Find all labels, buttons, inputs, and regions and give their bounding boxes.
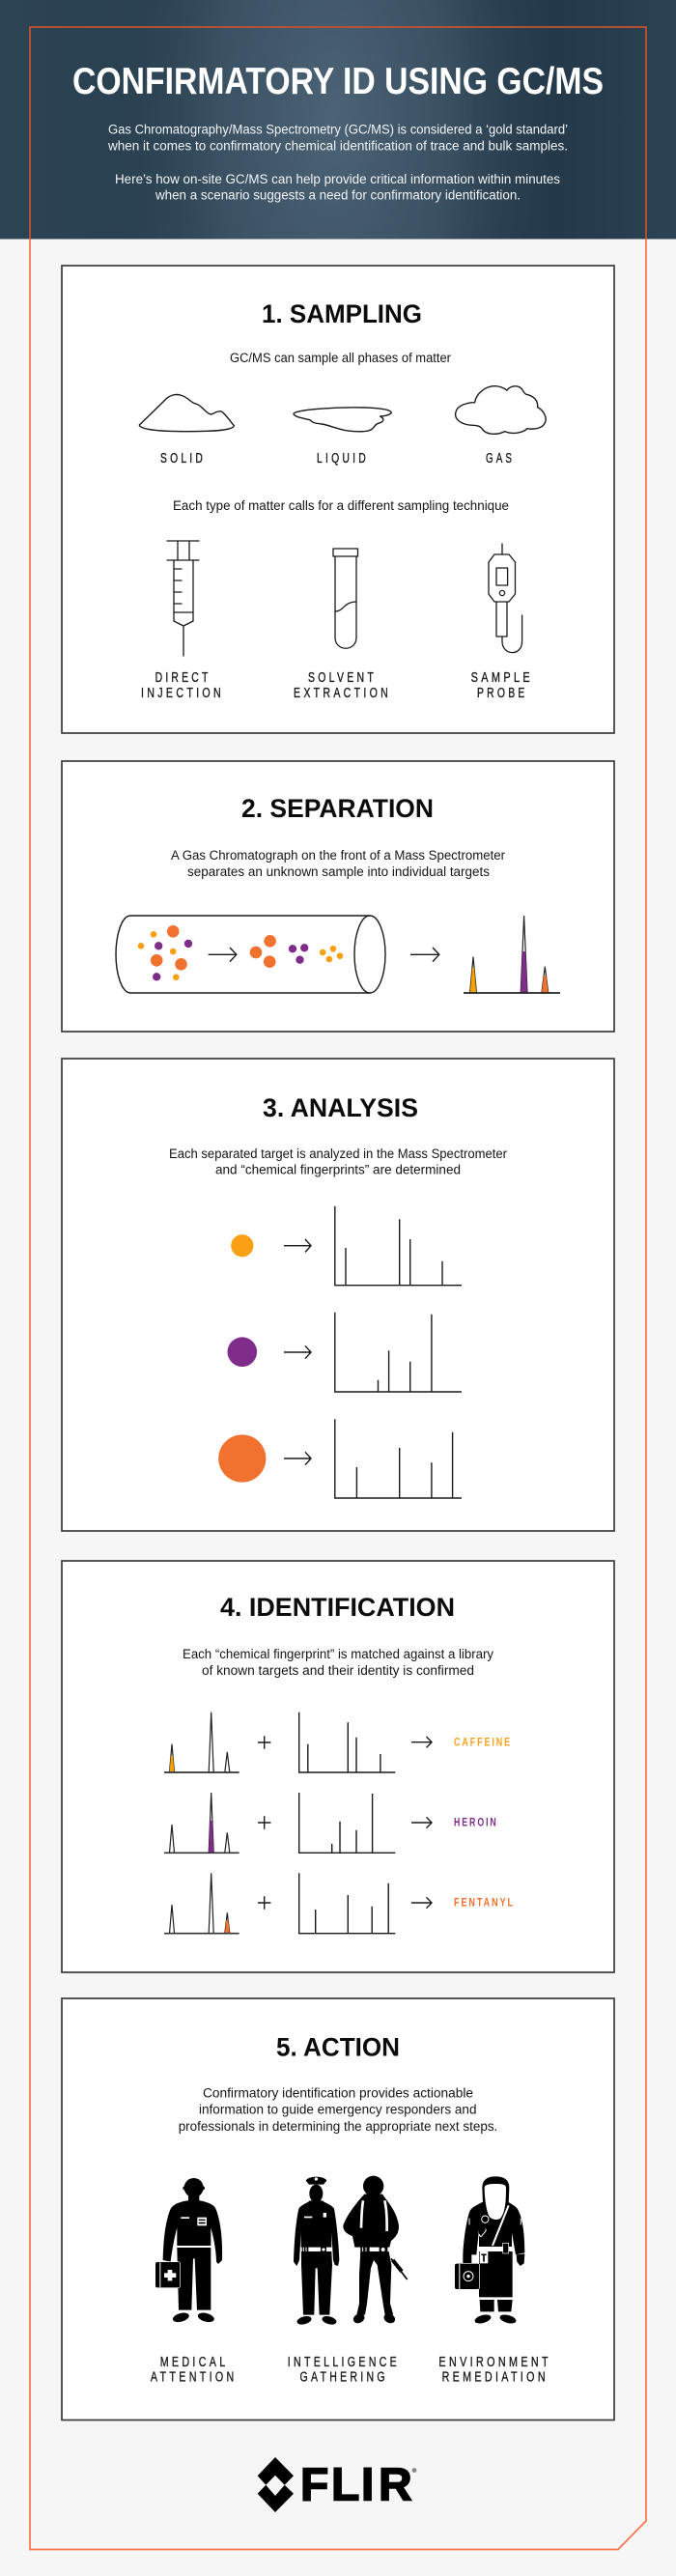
separated dots <box>250 935 343 968</box>
target: fentanyl dot <box>218 1434 266 1483</box>
label: fentanyl: FENTANYL <box>454 1897 515 1909</box>
icon: gas <box>456 386 546 434</box>
mass spectrum 1 <box>335 1206 462 1286</box>
label: solvent extraction: EXTRACTION <box>294 686 391 701</box>
plus <box>258 1896 270 1910</box>
row: fentanyl <box>164 1873 515 1934</box>
icon: syringe <box>167 541 199 656</box>
label: intelligence gathering: GATHERING <box>299 2370 388 2386</box>
row: caffeine <box>164 1713 512 1772</box>
label: direct injection: DIRECT <box>155 670 211 686</box>
text: phases of matter: GC/MS can sample all phases of matter <box>230 351 451 366</box>
text: separation description: separates an unknown sample into individual targets <box>187 864 490 880</box>
logo: FLIR: FLIR <box>300 2459 412 2511</box>
arrow <box>284 1239 311 1252</box>
text: sampling technique: Each type of matter calls for a different sampling technique <box>173 498 509 514</box>
icon: test tube <box>333 549 357 648</box>
arrow <box>411 1817 432 1828</box>
label: direct injection <box>141 670 224 701</box>
plus <box>258 1816 270 1829</box>
row: heroin <box>164 1793 498 1853</box>
text: identification description <box>183 1647 494 1679</box>
icon: solid <box>139 395 234 432</box>
intro text: when a scenario suggests a need for confirmatory identification. <box>155 188 521 204</box>
panel: 4. identification <box>62 1561 614 1972</box>
heading: action: 5. ACTION <box>276 2032 400 2061</box>
intro text: Here’s how on-site GC/MS can help provide critical information within minutes <box>115 172 560 187</box>
panel: 1. sampling <box>62 266 614 733</box>
label: environment remediation: ENVIRONMENT <box>438 2355 551 2370</box>
heading: analysis: 3. ANALYSIS <box>263 1093 418 1122</box>
label: intelligence gathering: INTELLIGENCE <box>288 2355 400 2370</box>
label: heroin: HEROIN <box>454 1817 498 1828</box>
mixed sample dots <box>138 925 192 981</box>
label: liquid: LIQUID <box>317 451 369 467</box>
icon: medic figure <box>155 2178 222 2324</box>
panel: 2. separation <box>62 761 614 1032</box>
heading: separation: 2. SEPARATION <box>241 794 434 823</box>
chromatogram <box>164 1873 239 1934</box>
heading: sampling: 1. SAMPLING <box>262 299 422 328</box>
text: separation description <box>171 848 505 880</box>
label: gas: GAS <box>486 451 515 467</box>
label: medical attention <box>151 2355 238 2386</box>
icon: tactical officer figure <box>343 2176 408 2325</box>
header banner <box>0 0 676 240</box>
label: solvent extraction: SOLVENT <box>308 670 377 686</box>
icon: sample probe <box>489 544 522 653</box>
chromatogram <box>164 1713 239 1772</box>
text: action description <box>179 2086 497 2135</box>
icon: police officer figure <box>294 2177 339 2326</box>
label: sample probe <box>471 670 533 701</box>
chromatogram <box>164 1793 239 1853</box>
text: action description: Confirmatory identification provides actionable <box>203 2086 473 2102</box>
panel: 5. action <box>62 1998 614 2420</box>
text: identification description: Each “chemical fingerprint” is matched against a library <box>183 1647 494 1662</box>
arrow <box>284 1345 311 1359</box>
label: medical attention: MEDICAL <box>160 2355 228 2370</box>
plus <box>258 1736 270 1749</box>
arrow <box>411 1897 432 1909</box>
chromatogram <box>464 916 560 993</box>
intro text: when it comes to confirmatory chemical identification of trace and bulk samples. <box>107 139 568 155</box>
label: sample probe: SAMPLE <box>471 670 533 686</box>
label: solvent extraction <box>294 670 391 701</box>
title: CONFIRMATORY ID USING GC/MS <box>72 61 604 102</box>
panel: 3. analysis <box>62 1059 614 1531</box>
label: environment remediation: REMEDIATION <box>442 2370 549 2386</box>
text: action description: professionals in determining the appropriate next steps. <box>179 2119 497 2135</box>
label: caffeine: CAFFEINE <box>454 1737 512 1748</box>
text: separation description: A Gas Chromatograph on the front of a Mass Spectrometer <box>171 848 505 863</box>
text: analysis description: Each separated target is analyzed in the Mass Spectrometer <box>169 1146 507 1162</box>
arrow <box>284 1452 311 1465</box>
text: action description: information to guide emergency responders and <box>199 2103 477 2118</box>
label: environment remediation <box>438 2355 551 2386</box>
heading: identification: 4. IDENTIFICATION <box>220 1593 455 1622</box>
label: intelligence gathering <box>288 2355 400 2386</box>
mass spectrum <box>299 1793 395 1853</box>
arrow <box>209 948 237 962</box>
text: analysis description: and “chemical fingerprints” are determined <box>215 1163 461 1178</box>
text: identification description: of known targets and their identity is confirmed <box>202 1663 474 1679</box>
arrow <box>410 948 439 962</box>
label: medical attention: ATTENTION <box>151 2370 238 2386</box>
mass spectrum 2 <box>335 1313 462 1392</box>
target: caffeine dot <box>231 1234 253 1257</box>
intro text <box>107 122 568 204</box>
intro text: Gas Chromatography/Mass Spectrometry (GC/MS) is considered a ‘gold standard’ <box>108 122 568 137</box>
logo: FLIR <box>258 2457 416 2512</box>
label: direct injection: INJECTION <box>141 686 224 701</box>
icon: liquid <box>294 408 391 432</box>
text: analysis description <box>169 1146 507 1178</box>
target: heroin dot <box>228 1337 257 1367</box>
icon: column tube <box>116 916 385 993</box>
label: sample probe: PROBE <box>477 686 527 701</box>
icon: hazmat figure <box>455 2176 524 2325</box>
mass spectrum <box>299 1713 395 1772</box>
mass spectrum <box>299 1873 395 1934</box>
arrow <box>411 1737 432 1747</box>
label: solid: SOLID <box>160 451 206 467</box>
mass spectrum 3 <box>335 1419 462 1498</box>
